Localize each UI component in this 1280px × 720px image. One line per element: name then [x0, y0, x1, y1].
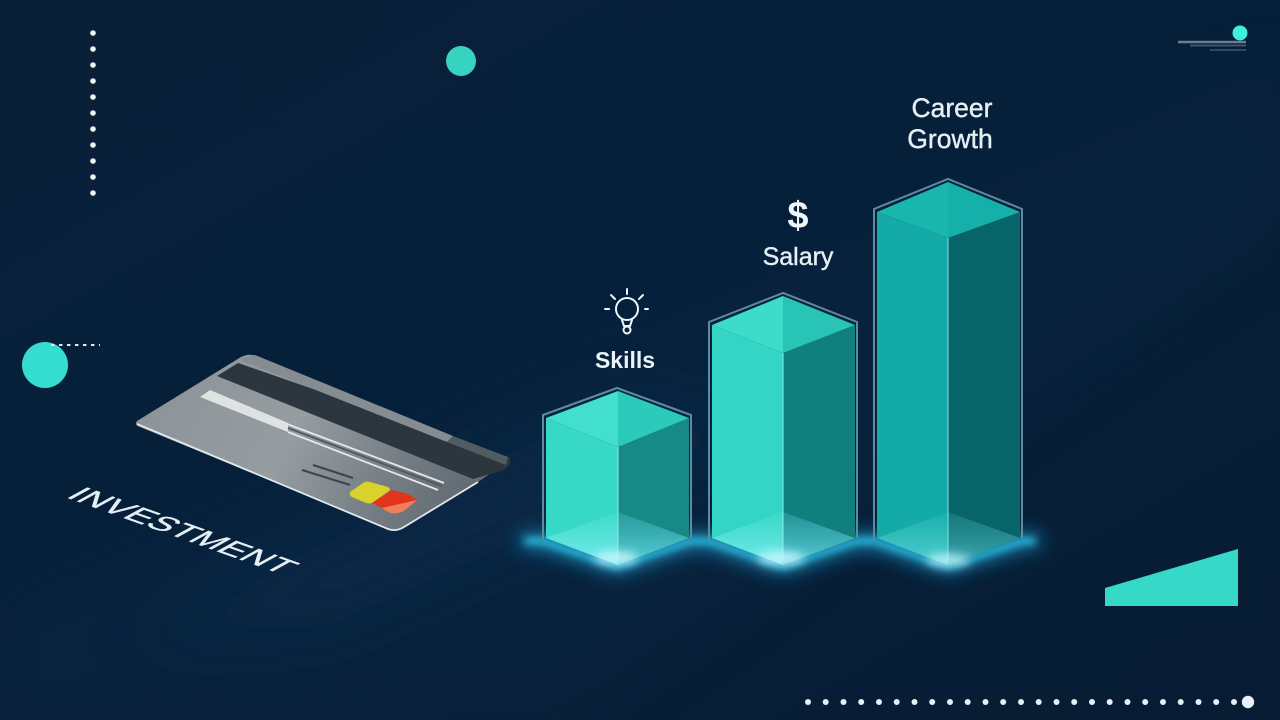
bar: salary: [709, 293, 857, 565]
signature lines: [287, 424, 444, 490]
right face: [948, 212, 1020, 565]
icon: light bulb: [605, 289, 648, 334]
front edge: [782, 353, 784, 560]
investment label: INVESTMENT: [58, 483, 306, 578]
left face: [877, 212, 948, 565]
outline: [874, 179, 1022, 540]
label: skills: Skills: [595, 347, 655, 373]
outline: [709, 293, 857, 540]
card body: [136, 355, 510, 530]
floor: [546, 512, 618, 565]
bar: career growth: [874, 179, 1022, 565]
bar: skills: [543, 388, 691, 565]
front edge: [947, 238, 949, 560]
top face: [712, 296, 783, 353]
credit card: [136, 355, 510, 530]
left face: [546, 418, 618, 565]
right face: [618, 418, 689, 565]
label: career growth: Growth: [907, 124, 993, 154]
floor: [877, 512, 948, 565]
left face: [712, 325, 783, 565]
magnetic stripe: [217, 363, 510, 479]
outline: [543, 388, 691, 540]
right face: [783, 325, 855, 565]
front edge: [617, 447, 619, 560]
top strip: [240, 355, 453, 442]
top-right circle with speed lines: [1178, 26, 1248, 50]
teal circle top: [446, 46, 476, 76]
floor: [712, 512, 783, 565]
label: career growth: Career: [911, 93, 993, 123]
top face: [877, 182, 948, 238]
dotted horizontal line: [805, 696, 1254, 708]
signature panel: [200, 390, 288, 432]
base light spots: [594, 552, 970, 565]
label: salary: Salary: [763, 243, 834, 271]
icon: dollar sign: $: [787, 195, 809, 237]
dotted vertical line: [90, 30, 96, 196]
card number marks: [302, 465, 353, 485]
label: career growth: [907, 93, 993, 154]
card bottom rim: [137, 424, 478, 530]
top face: [546, 391, 618, 447]
card logo: [350, 482, 418, 513]
teal wedge: [1105, 549, 1238, 606]
teal circle left with dashed line: [22, 342, 100, 388]
bars glow: [520, 541, 1040, 566]
